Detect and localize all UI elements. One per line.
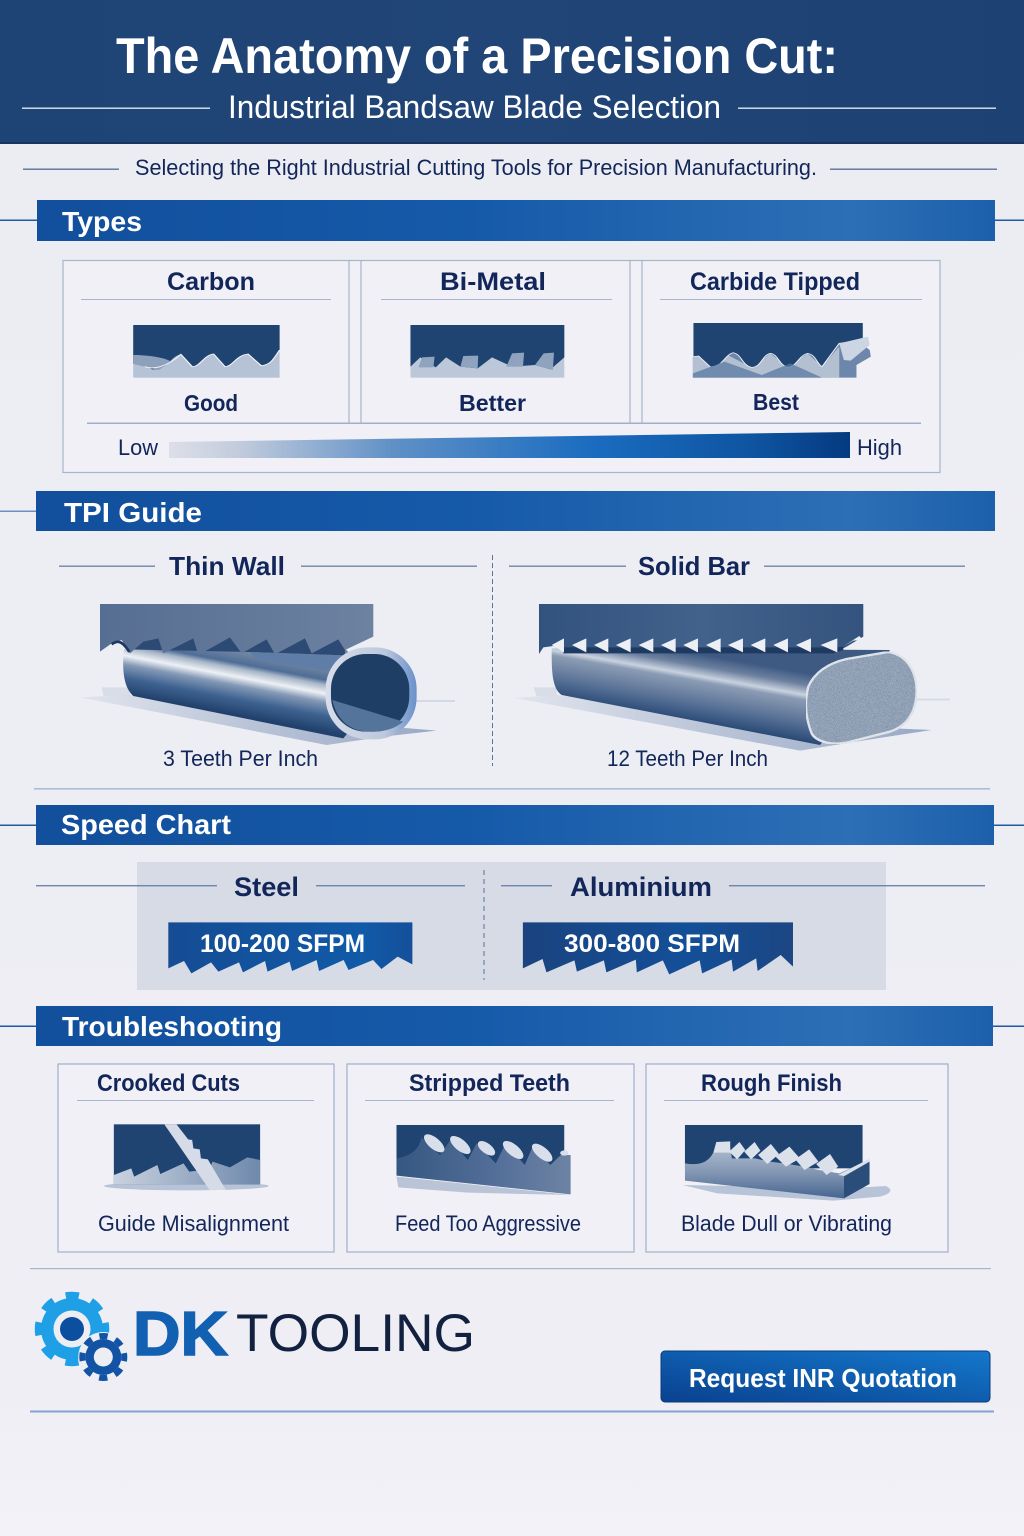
section heading: Types [0, 200, 1024, 241]
speed: Aluminium [501, 872, 985, 974]
card: Carbide Tipped [642, 260, 922, 423]
panel: Crooked Cuts: Guide Misalignment [98, 1211, 289, 1236]
section heading: Types: Types [62, 206, 142, 237]
blade badge: steel speed [168, 922, 412, 973]
logo: DK Tooling [38, 1296, 475, 1382]
quality scale: High [857, 435, 902, 460]
section heading: Troubleshooting [0, 1006, 1024, 1046]
card: Carbide Tipped: Best [753, 389, 799, 415]
subheading: Solid Bar: Solid Bar [638, 551, 750, 581]
logo: DK Tooling: DK [133, 1300, 228, 1369]
card: Carbon: Good [184, 390, 238, 416]
button: Request INR Quotation: Request INR Quotation [689, 1363, 957, 1393]
panel: Solid Bar [509, 551, 965, 771]
panel: Rough Finish [646, 1064, 948, 1252]
header banner [0, 0, 1024, 144]
panel: blade types [63, 260, 940, 472]
section heading: Speed Chart: Speed Chart [61, 809, 231, 840]
icon: small gear [78, 1332, 128, 1382]
section heading: TPI Guide: TPI Guide [64, 497, 202, 528]
panel: Crooked Cuts: Crooked Cuts [97, 1070, 240, 1097]
quality scale: Low [118, 435, 158, 460]
caption: 12 TPI: 12 Teeth Per Inch [607, 746, 768, 771]
subheading: Thin Wall: Thin Wall [169, 551, 285, 581]
icon: rough finish blade [683, 1125, 890, 1201]
card: Bi-Metal [361, 260, 630, 423]
panel: Thin Wall [59, 551, 477, 771]
card: Carbon: Carbon [167, 268, 255, 296]
caption: 3 TPI: 3 Teeth Per Inch [163, 746, 318, 771]
panel: Stripped Teeth: Stripped Teeth [409, 1070, 570, 1097]
illustration: tube under blade [80, 604, 455, 745]
panel: Rough Finish: Rough Finish [701, 1070, 842, 1097]
quality scale [118, 432, 902, 460]
panel: speed chart [36, 862, 985, 990]
blade badge: aluminium speed: 300-800 SFPM [564, 930, 740, 958]
button: Request INR Quotation [661, 1351, 990, 1402]
card: Bi-Metal: Better [459, 390, 526, 416]
icon: bi-metal blade [410, 325, 564, 378]
speed: Aluminium: Aluminium [570, 872, 712, 902]
illustration: solid bar under blade [515, 604, 950, 751]
section heading: TPI Guide [0, 491, 995, 531]
speed: Steel [36, 872, 465, 973]
strapline: Selecting the Right Industrial Cutting Tools for Precision Manufacturing. [135, 155, 817, 180]
saw blade [100, 604, 373, 655]
panel: Stripped Teeth: Feed Too Aggressive [395, 1211, 581, 1236]
panel: Rough Finish: Blade Dull or Vibrating [681, 1211, 892, 1236]
section heading: Troubleshooting: Troubleshooting [62, 1011, 282, 1042]
subtitle: Industrial Bandsaw Blade Selection [228, 89, 721, 125]
icon: stripped teeth blade [396, 1125, 571, 1195]
title: The Anatomy of a Precision Cut: [116, 28, 838, 84]
saw blade [539, 604, 863, 654]
icon: crooked cut blade [104, 1124, 269, 1190]
icon: carbon blade [133, 325, 280, 378]
card: Carbide Tipped: Carbide Tipped [690, 268, 860, 296]
blade badge: steel speed: 100-200 SFPM [200, 930, 365, 958]
panel: Crooked Cuts [58, 1064, 334, 1252]
logo: DK Tooling: TOOLING [236, 1304, 475, 1363]
panel: Stripped Teeth [347, 1064, 634, 1252]
section heading: Speed Chart [0, 805, 1024, 845]
icon: carbide tipped blade [693, 323, 871, 378]
card: Bi-Metal: Bi-Metal [440, 268, 546, 296]
icon: large gear [38, 1296, 106, 1362]
blade badge: aluminium speed [523, 922, 793, 974]
card: Carbon [81, 260, 349, 423]
speed: Steel: Steel [234, 872, 299, 902]
